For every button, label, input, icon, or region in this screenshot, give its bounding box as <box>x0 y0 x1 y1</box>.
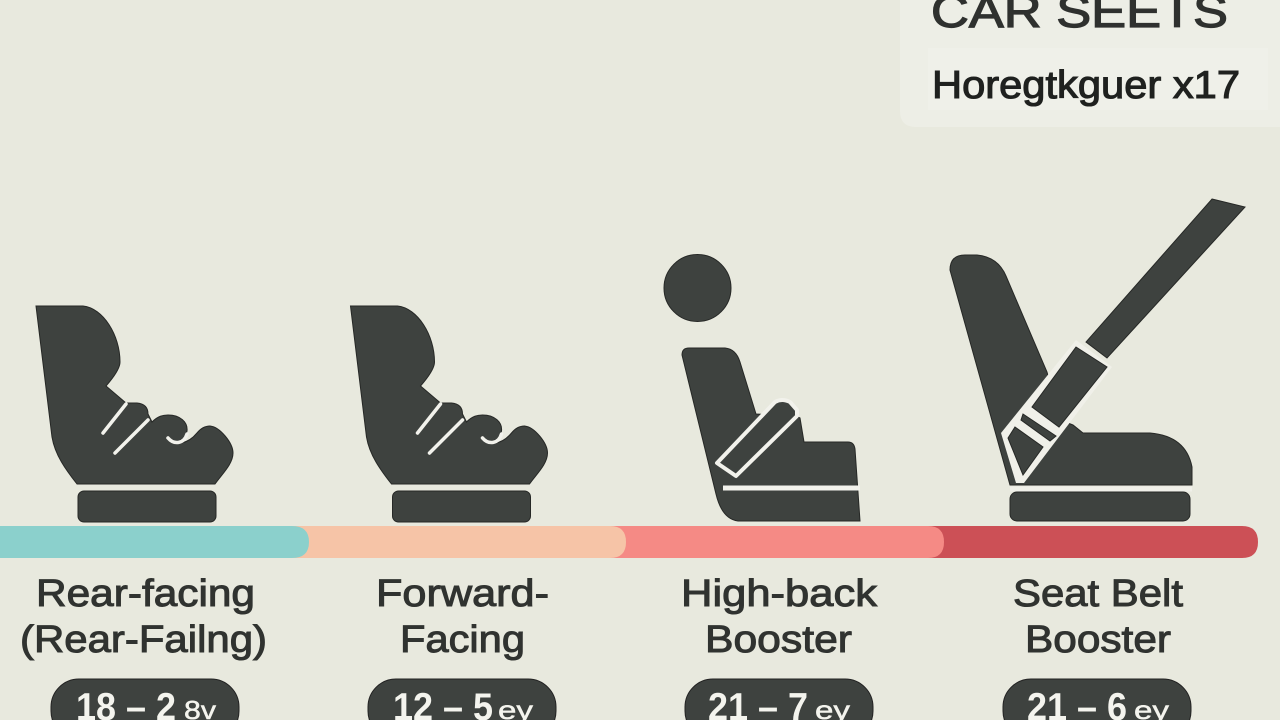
label: high-back booster <box>681 573 878 661</box>
label: rear-facing: Rear-facing <box>36 573 255 615</box>
panel: title card <box>900 0 1280 127</box>
icon: seat belt booster <box>950 199 1245 521</box>
label: rear-facing: (Rear-Failng) <box>20 619 267 661</box>
label: forward-facing: Forward- <box>376 573 549 615</box>
label: seat belt booster: Booster <box>1025 619 1171 661</box>
label: forward-facing: Facing <box>400 619 525 661</box>
age pill: high-back booster <box>685 679 873 720</box>
label: rear-facing <box>20 573 267 661</box>
age pill: seat belt booster <box>1003 679 1191 720</box>
label: forward-facing <box>376 573 549 661</box>
label: seat belt booster <box>1013 573 1183 661</box>
age pill: rear-facing <box>51 679 239 720</box>
icon: high-back booster <box>664 254 860 521</box>
icon: rear-facing seat <box>36 306 233 522</box>
subtitle: Horegtkguer x17 <box>932 64 1240 107</box>
icon: forward-facing seat <box>350 306 548 522</box>
label: high-back booster: High-back <box>681 573 878 615</box>
age pill: forward-facing <box>368 679 556 720</box>
label: seat belt booster: Seat Belt <box>1013 573 1183 615</box>
timeline bar <box>0 526 1258 558</box>
label: high-back booster: Booster <box>705 619 852 661</box>
